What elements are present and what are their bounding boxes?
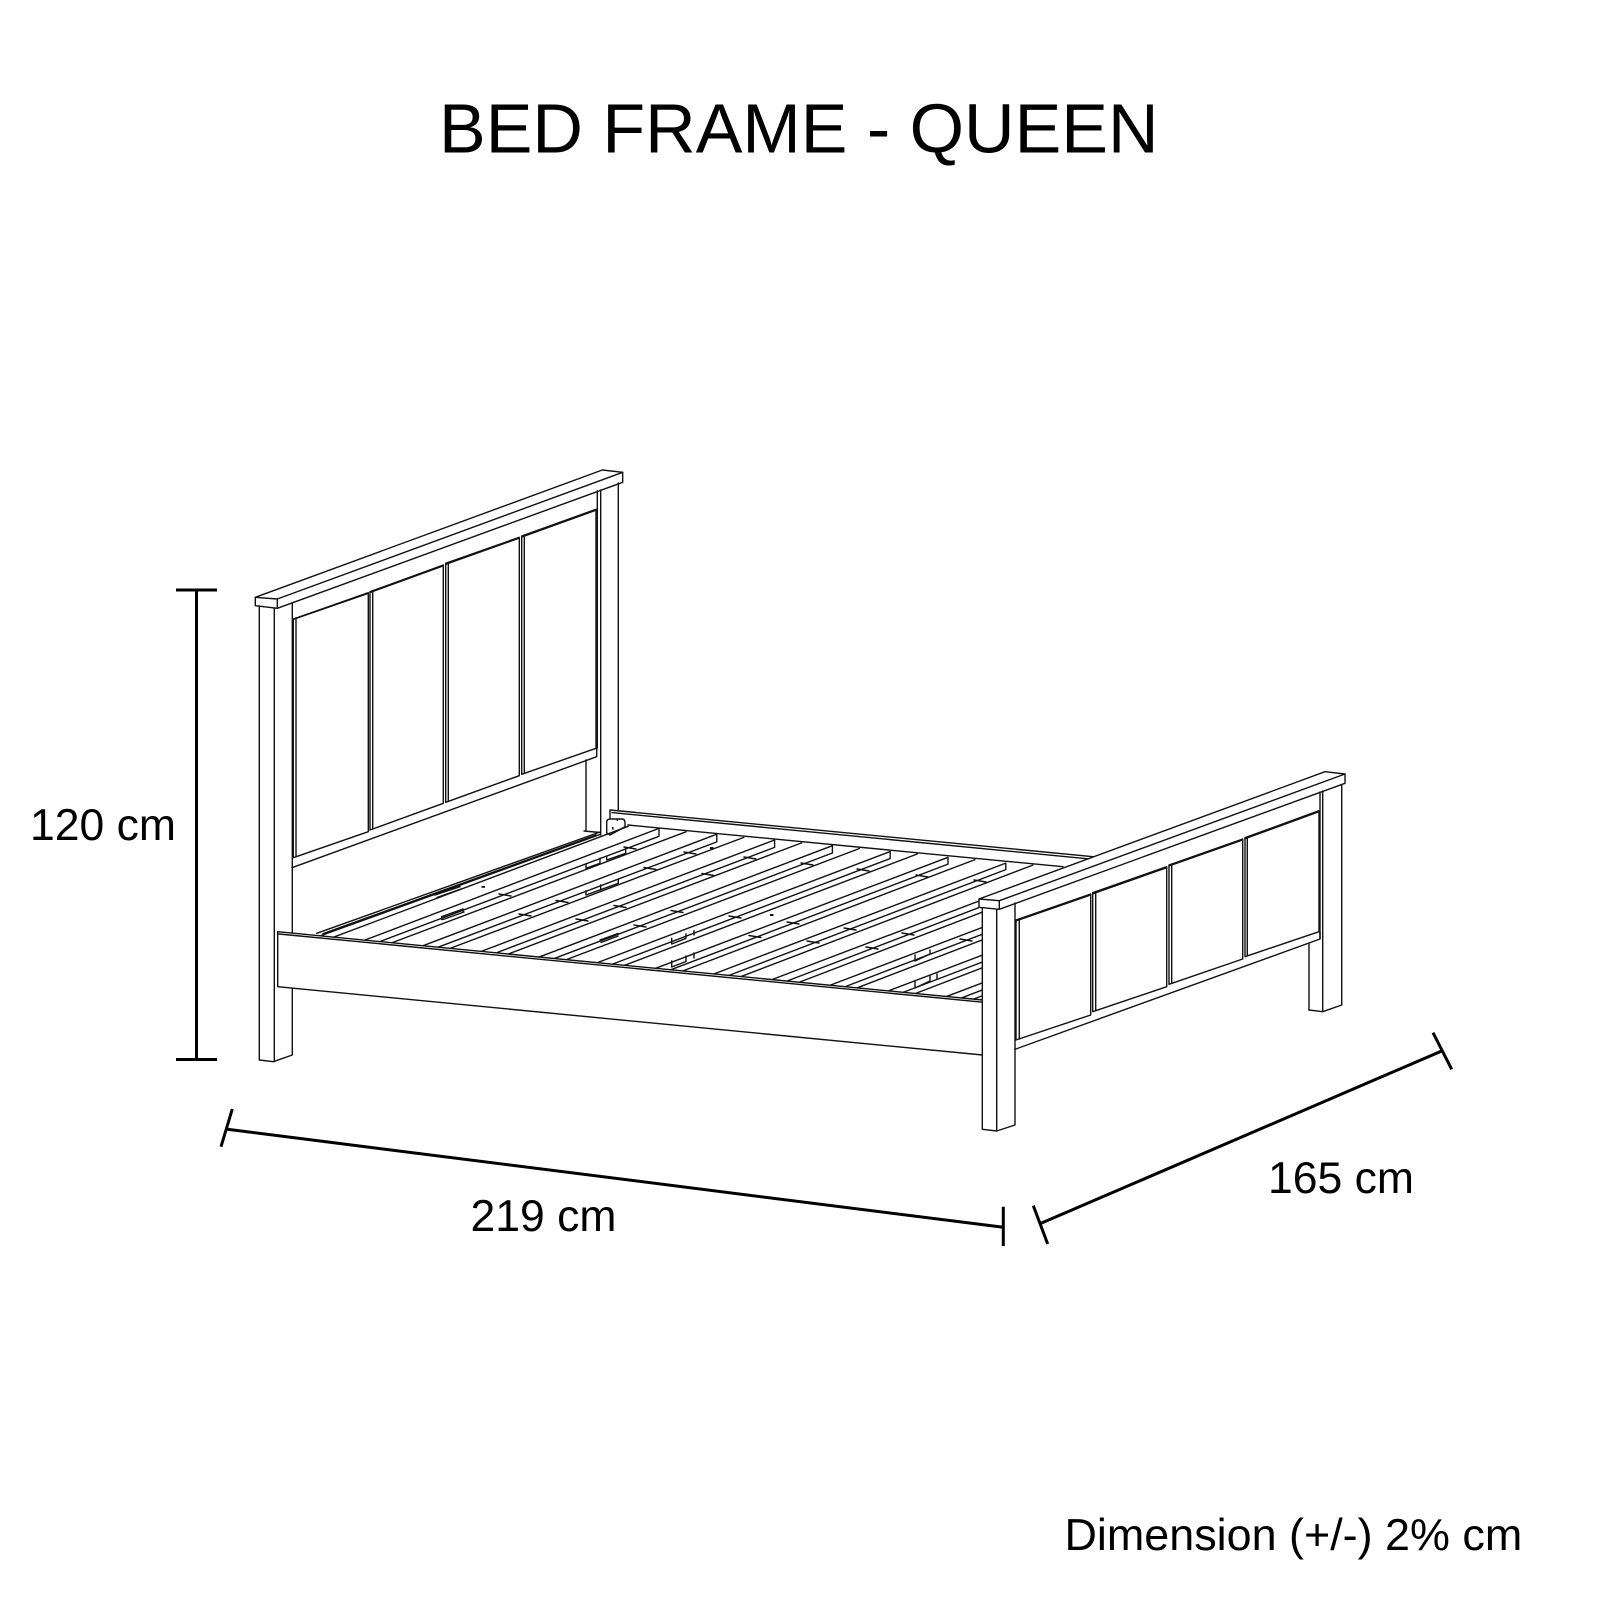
footboard top rail: [979, 772, 1345, 909]
footboard legs: [982, 785, 1342, 1131]
headboard legs and posts: [259, 483, 618, 1062]
title: BED FRAME - QUEEN: [439, 90, 1159, 168]
footboard panels: [1015, 811, 1320, 1049]
corner bracket: [607, 819, 625, 835]
slat fixing dots: [482, 819, 774, 916]
width label: 165 cm: [1268, 1154, 1414, 1203]
width dimension line: [1033, 1033, 1452, 1244]
far side rail: [610, 810, 1093, 867]
headboard top rail: [255, 470, 623, 608]
tolerance note: Dimension (+/-) 2% cm: [1064, 1509, 1522, 1560]
length label: 219 cm: [470, 1192, 616, 1241]
headboard panels: [292, 509, 597, 868]
footboard backing: [979, 772, 1345, 1131]
slat cross supports: [435, 847, 986, 988]
length dimension line: [221, 1109, 1003, 1246]
slats: [317, 826, 1264, 1001]
height label: 120 cm: [30, 801, 176, 850]
height dimension line: [176, 590, 217, 1060]
bed frame drawing: [255, 470, 1345, 1131]
near side rail: [278, 932, 983, 1055]
